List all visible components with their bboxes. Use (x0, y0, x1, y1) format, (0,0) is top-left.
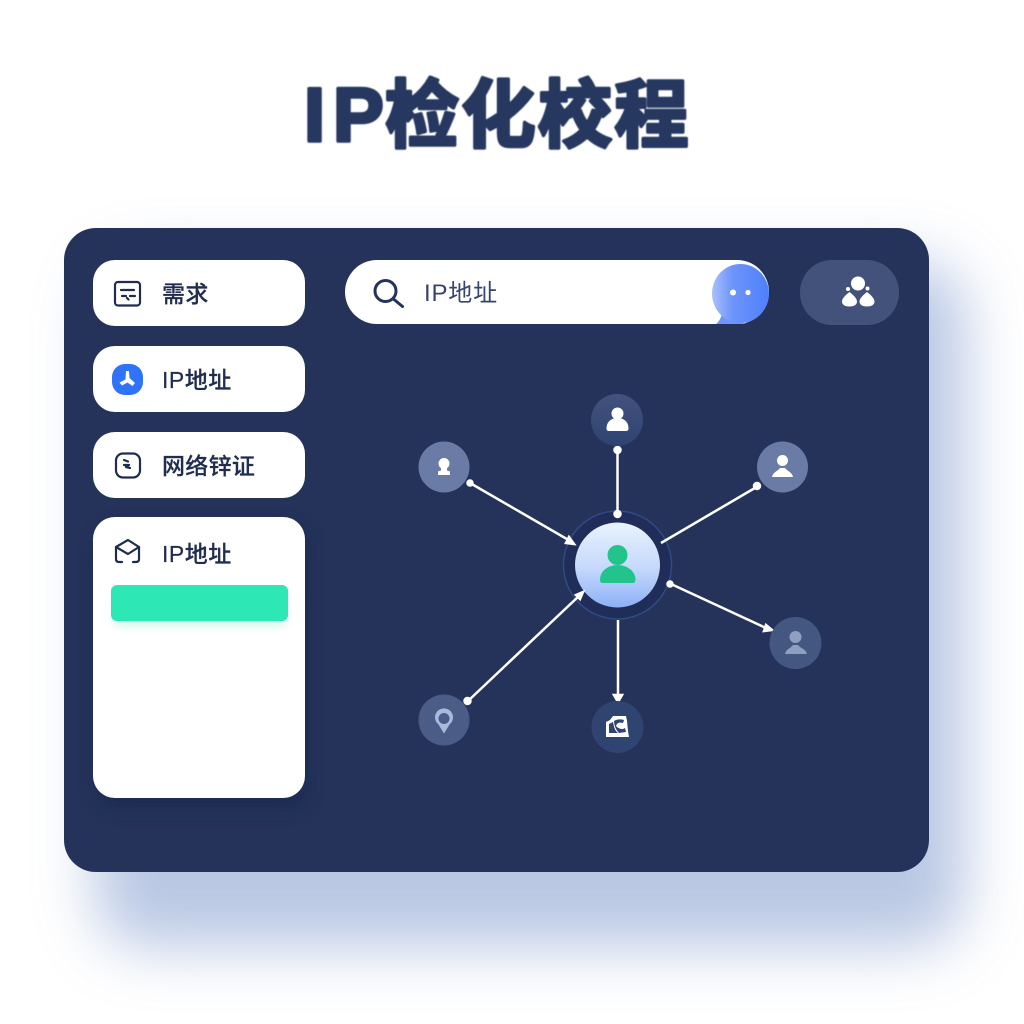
sidebar card: IP地址 (93, 517, 305, 798)
node: top (591, 394, 643, 446)
chat button (712, 264, 769, 324)
sidebar item: 需求 (93, 260, 305, 326)
sidebar card shadow (95, 525, 310, 810)
label: 需求: 需求 (162, 281, 209, 307)
node: lower left (418, 694, 470, 746)
title: I (304, 73, 325, 158)
connector lines (464, 447, 772, 704)
icon: hub person (600, 545, 636, 583)
panel: main dashboard (64, 228, 929, 872)
search text: IP地址 (424, 280, 498, 307)
node: upper right (757, 442, 808, 492)
title: 检化校程 (385, 74, 691, 157)
sidebar item: 网络锌证 (93, 432, 305, 498)
icon: square face (116, 454, 140, 478)
label: 网络锌证: 网络锌证 (162, 453, 255, 479)
node: bottom (592, 701, 644, 753)
sidebar item: IP地址 (93, 346, 305, 412)
icon: magnifier (375, 280, 402, 306)
hub (564, 511, 672, 619)
green bar (111, 585, 288, 626)
search bar (345, 260, 769, 324)
group button (800, 260, 899, 325)
icon: envelope (116, 540, 139, 562)
node: upper left (418, 442, 470, 492)
panel shadow (95, 262, 965, 947)
icon: form (115, 282, 140, 306)
icon: people (842, 276, 874, 306)
label: IP地址: IP地址 (162, 541, 232, 567)
title: P (333, 73, 384, 158)
label: IP地址: IP地址 (162, 367, 232, 393)
network diagram (418, 394, 822, 753)
icon: blue badge (112, 364, 143, 395)
node: lower right (770, 617, 822, 669)
